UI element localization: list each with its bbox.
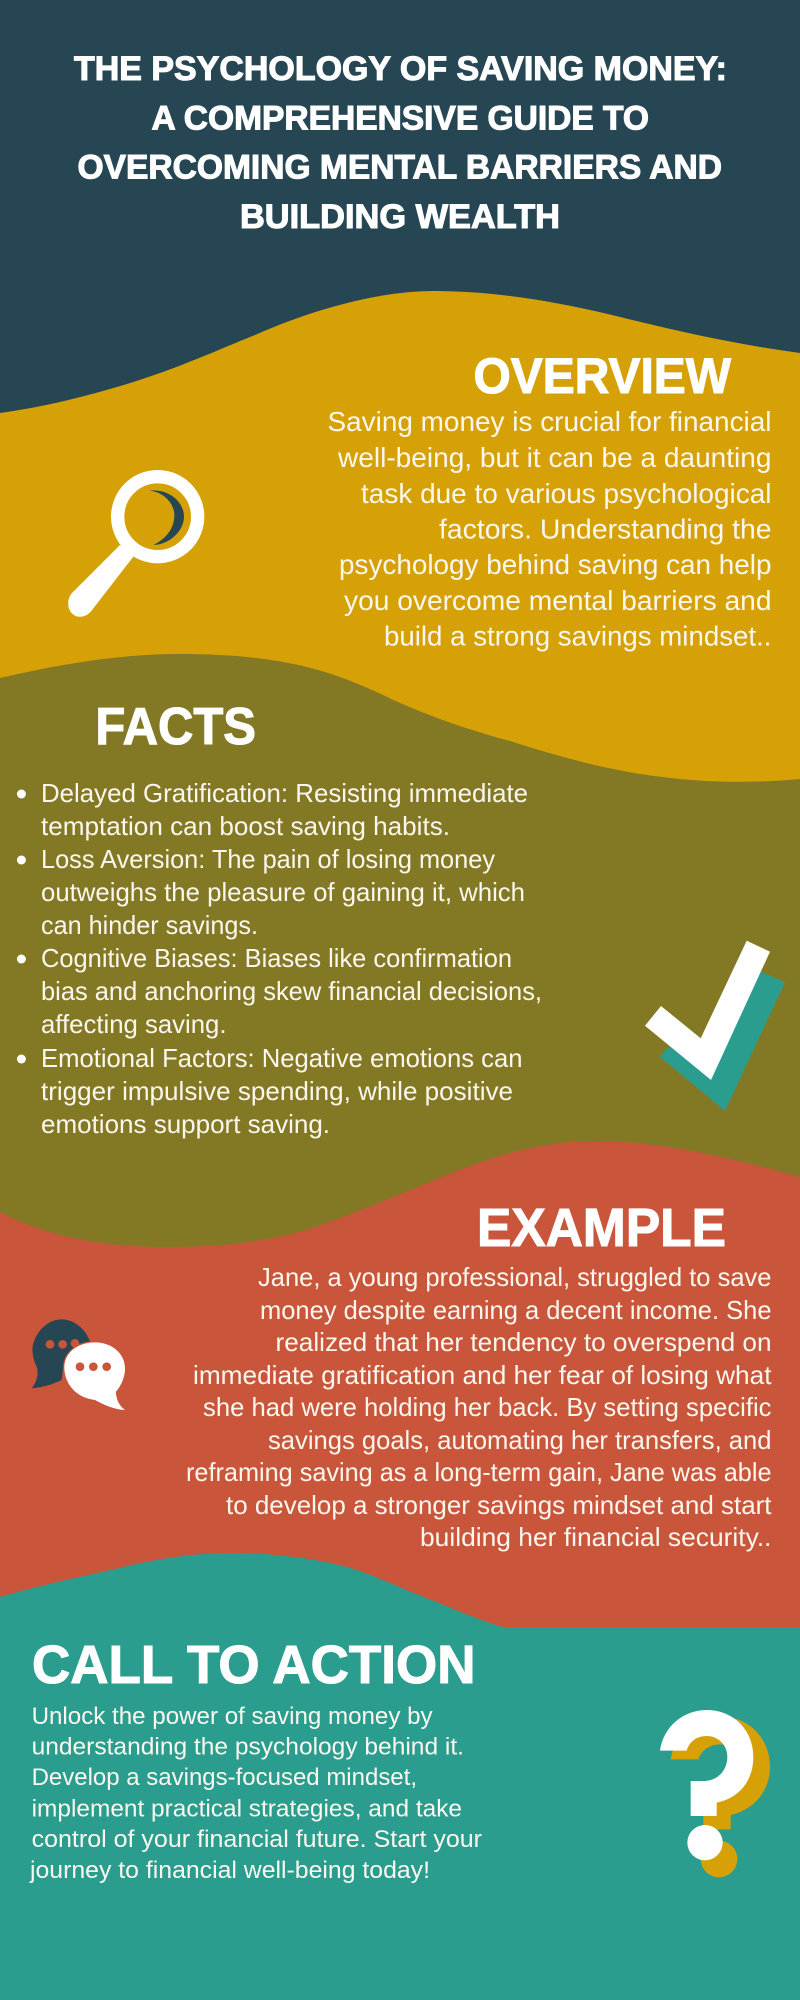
overview text: factors. Understanding the bbox=[439, 514, 772, 544]
title: A COMPREHENSIVE GUIDE TO bbox=[152, 100, 649, 138]
facts list: bias and anchoring skew financial decisions, bbox=[41, 976, 542, 1006]
facts list: Delayed Gratification: Resisting immediate bbox=[41, 778, 528, 808]
example text: immediate gratification and her fear of losing what bbox=[193, 1360, 772, 1390]
facts list: Cognitive Biases: Biases like confirmation bbox=[41, 943, 512, 973]
example text bbox=[186, 1262, 772, 1552]
title bbox=[74, 50, 727, 236]
example text: savings goals, automating her transfers, and bbox=[268, 1425, 772, 1455]
call to action text: control of your financial future. Start your bbox=[32, 1826, 482, 1853]
call to action text: implement practical strategies, and take bbox=[32, 1796, 462, 1822]
title: THE PSYCHOLOGY OF SAVING MONEY: bbox=[74, 50, 727, 88]
panel: overview bbox=[0, 291, 800, 790]
panel: facts bbox=[0, 654, 800, 1250]
icon: question mark bbox=[660, 1710, 770, 1877]
title: OVERCOMING MENTAL BARRIERS AND bbox=[78, 148, 722, 186]
example text: money despite earning a decent income. She bbox=[260, 1295, 772, 1325]
example heading: EXAMPLE bbox=[477, 1198, 726, 1258]
overview text: build a strong savings mindset.. bbox=[384, 620, 772, 652]
icon: magnifying glass bbox=[68, 477, 198, 617]
example text: she had were holding her back. By setting specific bbox=[203, 1392, 772, 1422]
facts list: Loss Aversion: The pain of losing money bbox=[41, 844, 495, 874]
facts list: trigger impulsive spending, while positive bbox=[41, 1076, 513, 1106]
facts list: temptation can boost saving habits. bbox=[41, 811, 450, 841]
title: BUILDING WEALTH bbox=[240, 198, 560, 236]
overview text: psychology behind saving can help bbox=[339, 549, 772, 580]
overview text bbox=[328, 406, 772, 652]
call to action text bbox=[29, 1703, 482, 1884]
icon: speech bubbles bbox=[32, 1319, 125, 1410]
facts list: can hinder savings. bbox=[41, 910, 258, 940]
icon: check mark bbox=[645, 941, 785, 1111]
panel: title header bbox=[0, 0, 800, 420]
example text: building her financial security.. bbox=[420, 1522, 772, 1552]
panel: call to action bbox=[0, 1553, 800, 2000]
call to action text: understanding the psychology behind it. bbox=[32, 1734, 464, 1760]
example text: reframing saving as a long-term gain, Jane was able bbox=[186, 1457, 772, 1487]
facts list: emotions support saving. bbox=[41, 1109, 330, 1139]
overview text: you overcome mental barriers and bbox=[344, 585, 772, 616]
call to action text: Unlock the power of saving money by bbox=[32, 1703, 433, 1730]
facts list: affecting saving. bbox=[41, 1009, 226, 1039]
facts list: Emotional Factors: Negative emotions can bbox=[41, 1043, 522, 1073]
facts list bbox=[17, 778, 542, 1139]
call to action heading: CALL TO ACTION bbox=[32, 1635, 476, 1695]
call to action text: journey to financial well-being today! bbox=[29, 1857, 430, 1884]
example text: Jane, a young professional, struggled to save bbox=[258, 1262, 772, 1292]
overview text: Saving money is crucial for financial bbox=[328, 406, 772, 437]
facts list: outweighs the pleasure of gaining it, which bbox=[41, 877, 525, 907]
overview text: well-being, but it can be a daunting bbox=[337, 442, 772, 473]
overview text: task due to various psychological bbox=[361, 478, 772, 509]
example text: to develop a stronger savings mindset and start bbox=[226, 1490, 772, 1520]
example text: realized that her tendency to overspend on bbox=[276, 1327, 772, 1357]
call to action text: Develop a savings-focused mindset, bbox=[32, 1764, 417, 1791]
panel: example bbox=[0, 1141, 800, 1630]
facts heading: FACTS bbox=[95, 698, 256, 756]
overview heading: OVERVIEW bbox=[474, 348, 732, 404]
